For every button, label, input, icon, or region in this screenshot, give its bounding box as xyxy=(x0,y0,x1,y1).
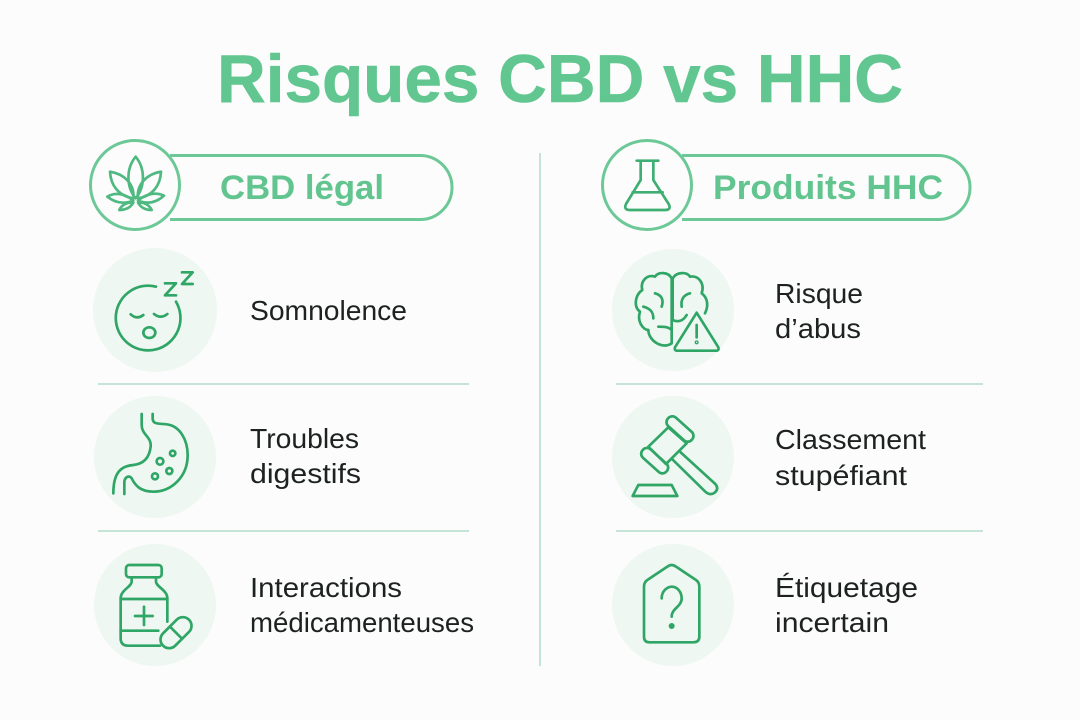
panel: CBD légal xyxy=(90,140,474,666)
item: Somnolence xyxy=(93,248,407,372)
label xyxy=(250,572,474,638)
label: Troubles xyxy=(250,423,359,454)
label: Somnolence xyxy=(250,295,407,326)
icon: medicine bottle and pill xyxy=(121,565,195,652)
title: Risques CBD vs HHC xyxy=(217,42,903,117)
icon: stomach xyxy=(113,414,188,494)
label: Étiquetage xyxy=(775,572,918,603)
panel: Produits HHC xyxy=(602,140,983,666)
label: Classement xyxy=(775,424,926,455)
label: Interactions xyxy=(250,572,402,603)
label xyxy=(775,278,863,344)
label: Risque xyxy=(775,278,863,309)
icon: label with question mark xyxy=(644,565,699,642)
header: CBD légal xyxy=(90,140,452,230)
label: médicamenteuses xyxy=(250,607,474,638)
item: Troubles digestifs xyxy=(94,396,361,518)
icon: sleeping face xyxy=(116,272,193,350)
item: Classement stupéfiant xyxy=(612,396,926,518)
label: incertain xyxy=(775,607,889,638)
label xyxy=(775,572,918,638)
item: Interactions médicamenteuses xyxy=(94,544,474,666)
label: digestifs xyxy=(250,458,361,489)
label: stupéfiant xyxy=(775,460,907,491)
header label: Produits HHC xyxy=(713,169,943,207)
label xyxy=(775,424,926,491)
item: Risque d'abus xyxy=(612,249,863,371)
label: d’abus xyxy=(775,313,861,344)
header label: CBD légal xyxy=(220,169,384,207)
icon: flask xyxy=(625,161,670,210)
icon: gavel xyxy=(633,414,717,496)
icon: brain with warning xyxy=(636,273,719,351)
icon: cannabis leaf xyxy=(107,157,164,210)
label xyxy=(250,423,361,489)
header: Produits HHC xyxy=(602,140,970,230)
item: Étiquetage incertain xyxy=(612,544,918,666)
